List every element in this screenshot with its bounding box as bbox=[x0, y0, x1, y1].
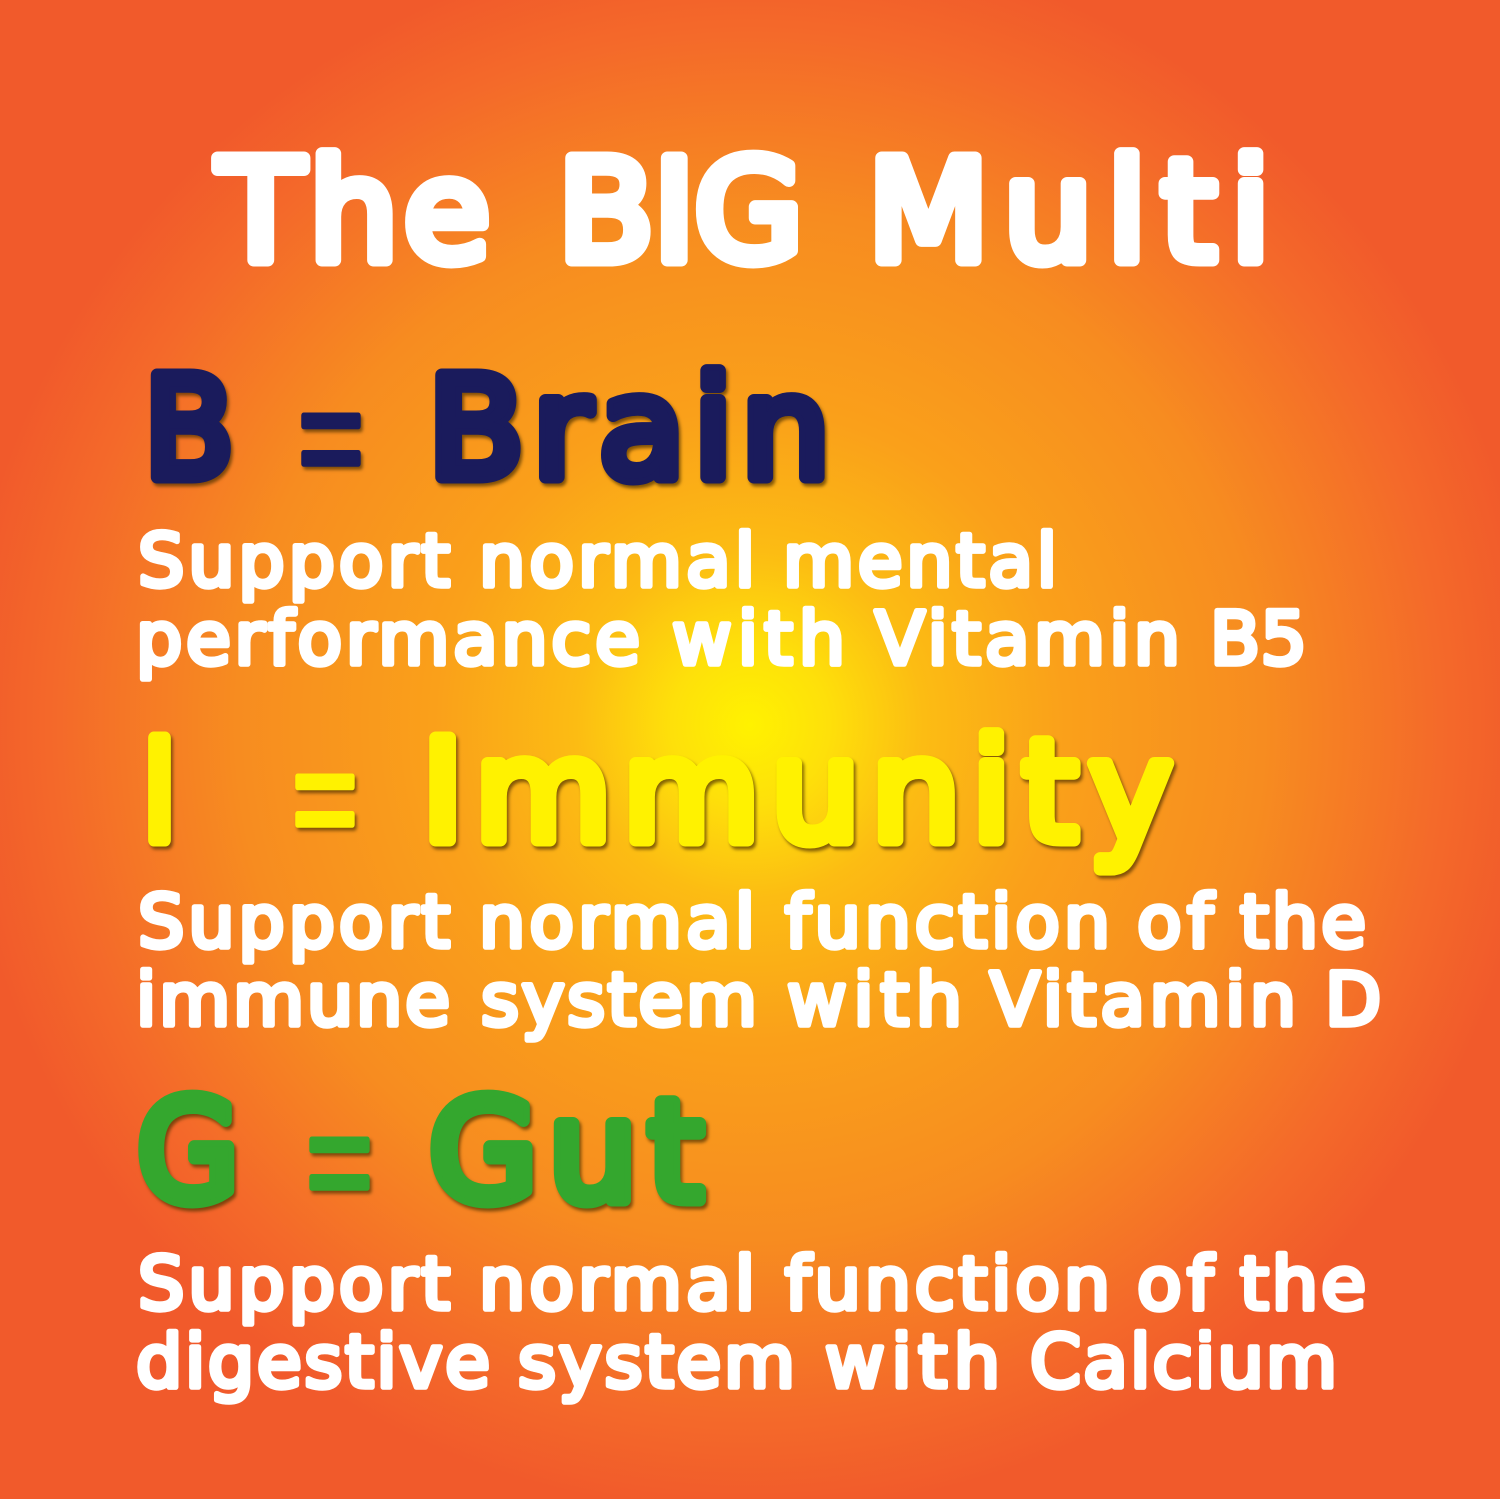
text: brain description bbox=[136, 519, 1307, 682]
heading: B = Brain: B bbox=[144, 348, 234, 511]
text: brain description: performance bbox=[136, 597, 640, 682]
title: Multi bbox=[868, 131, 1270, 294]
heading: B = Brain: Brain bbox=[428, 348, 830, 511]
heading: I = Immunity bbox=[142, 711, 1172, 882]
section: gut bbox=[136, 1071, 1366, 1405]
text: immunity description: with bbox=[787, 958, 962, 1043]
section: brain bbox=[136, 348, 1307, 682]
text: immunity description: of bbox=[1137, 880, 1215, 965]
section: immunity bbox=[136, 711, 1381, 1043]
text: gut description: function bbox=[785, 1242, 1110, 1327]
text: gut description: the bbox=[1240, 1242, 1366, 1327]
title bbox=[217, 131, 1270, 294]
text: brain description: normal bbox=[479, 519, 755, 604]
heading: G = Gut: G bbox=[137, 1071, 239, 1234]
text: gut description: system bbox=[518, 1320, 795, 1405]
heading: I = Immunity: = bbox=[292, 714, 358, 882]
text: immunity description: Vitamin bbox=[990, 958, 1296, 1043]
text: brain description: with bbox=[672, 597, 845, 682]
text: immunity description: Support bbox=[138, 880, 450, 965]
heading: B = Brain bbox=[144, 348, 830, 521]
heading: G = Gut: = bbox=[306, 1077, 373, 1245]
text: gut description: Support bbox=[138, 1242, 450, 1327]
heading: I = Immunity: I bbox=[142, 711, 177, 874]
text: gut description: with bbox=[825, 1320, 1000, 1405]
text: gut description: normal bbox=[479, 1242, 755, 1327]
text: immunity description: D bbox=[1325, 958, 1381, 1043]
text: brain description: B5 bbox=[1210, 597, 1307, 682]
heading: I = Immunity: Immunity bbox=[422, 711, 1172, 874]
text: brain description: mental bbox=[783, 519, 1057, 604]
text: immunity description: the bbox=[1240, 880, 1366, 965]
text: immunity description: system bbox=[481, 958, 757, 1043]
text: gut description: digestive bbox=[136, 1320, 490, 1405]
heading: G = Gut: Gut bbox=[429, 1071, 703, 1234]
title: BIG bbox=[558, 131, 803, 294]
heading: G = Gut bbox=[137, 1071, 703, 1245]
text: immunity description: normal bbox=[479, 880, 755, 965]
text: gut description: of bbox=[1137, 1242, 1215, 1327]
text: brain description: Support bbox=[138, 519, 450, 604]
text: gut description: Calcium bbox=[1030, 1320, 1337, 1405]
text: immunity description: immune bbox=[136, 958, 450, 1043]
title: The bbox=[217, 131, 490, 294]
text: brain description: Vitamin bbox=[875, 597, 1180, 682]
text: immunity description: function bbox=[785, 880, 1110, 965]
text: immunity description bbox=[136, 880, 1381, 1043]
text: gut description bbox=[136, 1242, 1366, 1405]
heading: B = Brain: = bbox=[298, 353, 364, 521]
